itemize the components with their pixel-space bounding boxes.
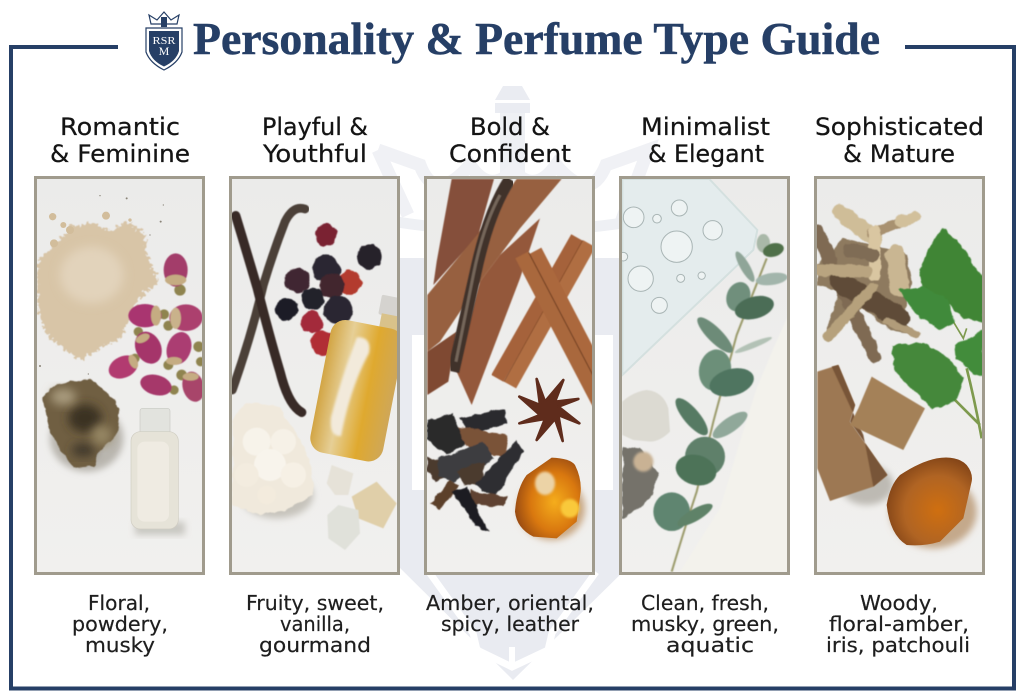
heading: Minimalist & Elegant	[641, 113, 770, 168]
star anise	[519, 379, 579, 441]
heading: Romantic & Feminine: & Feminine	[50, 140, 190, 168]
notes: Playful: gourmand	[259, 633, 371, 657]
notes: Romantic: powdery,	[72, 612, 168, 636]
heading: Bold & Confident	[449, 113, 571, 168]
eucalyptus branch	[653, 234, 788, 572]
heading: Sophisticated & Mature: Sophisticated	[815, 113, 984, 141]
heading: Playful & Youthful: Playful &	[262, 113, 368, 141]
panel: sophisticated ingredients	[814, 176, 985, 575]
cinnamon sticks	[497, 238, 607, 405]
notes: Bold: Amber, oriental,	[426, 591, 594, 615]
heading: Bold & Confident: Bold &	[470, 113, 550, 141]
amber stone	[515, 458, 585, 540]
stones	[622, 390, 670, 518]
clear bottle	[131, 408, 185, 535]
cotton ball	[232, 402, 313, 518]
resin rock	[43, 378, 123, 472]
panel: romantic ingredients	[34, 176, 208, 575]
heading: Romantic & Feminine	[50, 113, 190, 168]
notes: Playful	[246, 591, 384, 657]
wood blocks	[817, 365, 925, 505]
water drops	[619, 200, 722, 313]
panel border	[816, 178, 984, 574]
notes: Romantic: musky	[85, 633, 155, 657]
panel border	[230, 178, 398, 574]
logo: shield crest: M	[159, 44, 170, 58]
dried roots	[817, 212, 917, 357]
green leaves	[892, 228, 984, 438]
notes: Sophisticated: Woody,	[860, 591, 938, 615]
notes: Minimalist	[631, 591, 779, 657]
amber stone	[887, 457, 977, 548]
notes: Sophisticated: floral-amber,	[829, 612, 969, 636]
logo: shield crest: RSR	[152, 35, 176, 47]
notes: Minimalist: musky, green,	[631, 612, 779, 636]
vanilla pod	[453, 179, 510, 372]
panel: minimalist ingredients	[619, 176, 790, 575]
notes: Sophisticated	[826, 591, 970, 657]
notes: Romantic: Floral,	[88, 591, 150, 615]
heading: Sophisticated & Mature	[815, 113, 984, 168]
watermark: crest	[378, 86, 648, 680]
notes: Minimalist: Clean, fresh,	[641, 591, 769, 615]
linen cloth	[680, 315, 788, 572]
notes: Playful: vanilla,	[280, 612, 350, 636]
notes: Bold	[426, 591, 594, 636]
heading: Minimalist & Elegant: & Elegant	[648, 140, 764, 168]
panel border	[36, 178, 204, 574]
glass pane	[622, 179, 757, 375]
heading: Sophisticated & Mature: & Mature	[843, 140, 955, 168]
leather strips	[427, 179, 562, 405]
logo: shield crest	[146, 12, 182, 70]
sugar crystals	[327, 465, 397, 550]
heading: Playful & Youthful	[262, 113, 368, 168]
panel: bold ingredients	[427, 179, 592, 572]
charcoal and wood chips	[427, 408, 524, 532]
powder pile	[37, 195, 164, 375]
vanilla pods	[232, 208, 305, 412]
notes: Romantic	[72, 591, 168, 657]
amber oil bottle	[310, 295, 397, 462]
notes: Bold: spicy, leather	[441, 612, 580, 636]
notes: Sophisticated: iris, patchouli	[826, 633, 970, 657]
notes: Playful: Fruity, sweet,	[246, 591, 384, 615]
panel border	[426, 178, 594, 574]
panel: playful ingredients	[232, 179, 397, 572]
heading: Minimalist & Elegant: Minimalist	[641, 113, 770, 141]
title: Personality & Perfume Type Guide	[193, 14, 880, 64]
dried berries	[276, 223, 382, 356]
rosebuds	[105, 253, 208, 404]
heading: Romantic & Feminine: Romantic	[60, 113, 180, 141]
panel border	[620, 178, 788, 574]
heading: Playful & Youthful: Youthful	[262, 140, 367, 168]
heading: Bold & Confident: Confident	[449, 140, 571, 168]
notes: Minimalist: aquatic	[666, 633, 754, 657]
